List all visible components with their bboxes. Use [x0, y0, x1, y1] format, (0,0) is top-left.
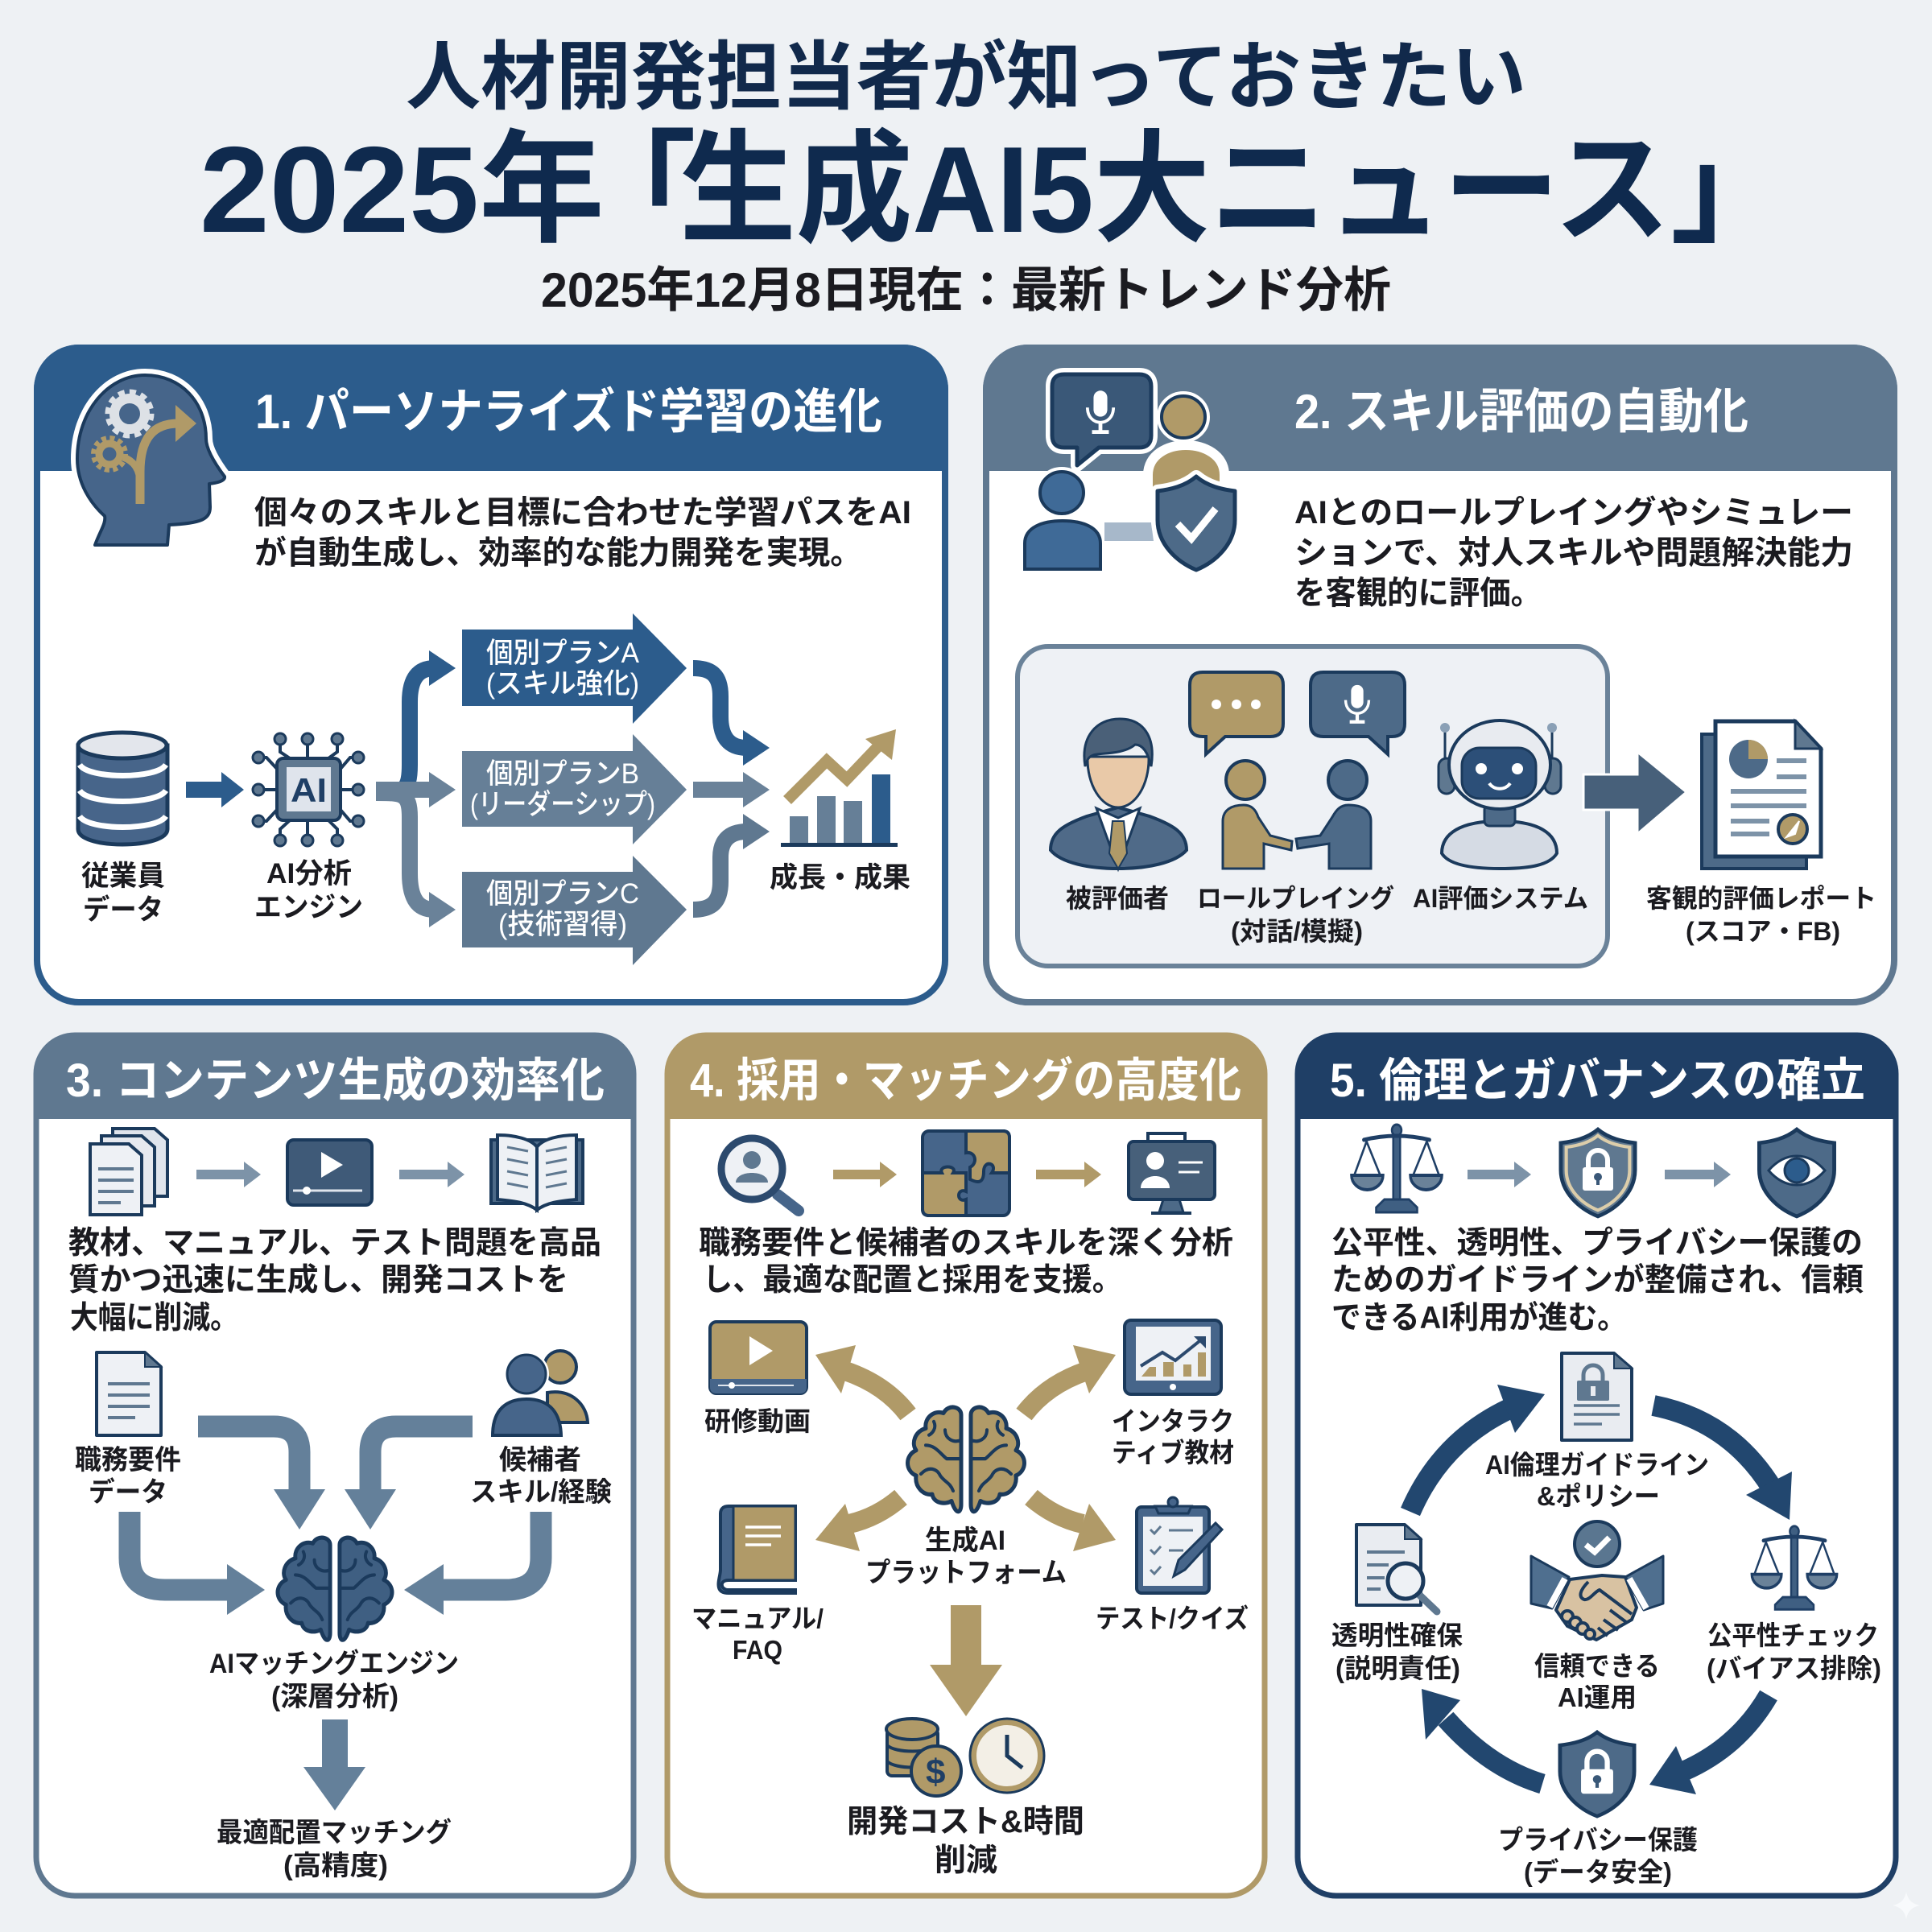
label: privacy protection: プライバシー保護 [1498, 1825, 1698, 1855]
label: employee data [81, 861, 165, 926]
curved arrows from brain [815, 1345, 1116, 1551]
arrow [1468, 1162, 1531, 1187]
panel 2 description: ションで、対人スキルや問題解決能力 [1294, 535, 1853, 571]
plan B arrow [462, 734, 687, 844]
icon: eye shield [1759, 1129, 1835, 1216]
title line 2: 生成AI5大ニュース [679, 122, 1670, 258]
icon: open book [491, 1135, 583, 1210]
label: optimal placement: (高精度) [283, 1851, 388, 1881]
labels: simulation [1066, 884, 1588, 946]
cycle arrows [1410, 1385, 1792, 1794]
labels: simulation: ロールプレイング [1197, 884, 1394, 913]
label: generative AI platform: 生成AI [925, 1525, 1005, 1556]
plan C arrow [462, 856, 687, 965]
panel 2: skill assessment [983, 345, 1897, 1002]
arrow [1036, 1162, 1101, 1187]
icon: monitor [1129, 1133, 1215, 1213]
label: generative AI platform [865, 1525, 1067, 1588]
panel 4 heading: 4. 採用・マッチングの高度化 [690, 1055, 1241, 1107]
title line 1: 人材開発担当者が知っておきたい [406, 35, 1526, 119]
icon: manual book [718, 1506, 795, 1593]
label: transparency: 透明性確保 [1331, 1620, 1463, 1650]
panel 5 description: ためのガイドラインが整備され、信頼 [1331, 1263, 1864, 1298]
icon: roleplay handshake [1223, 761, 1371, 869]
labels: inputs: スキル/経験 [470, 1477, 612, 1508]
panel 1: personalized learning [34, 345, 948, 1002]
label: AI engine [254, 858, 363, 923]
label: AI ethics guidelines: AI倫理ガイドライン [1485, 1450, 1709, 1480]
icon: corner sparkle [1893, 1892, 1920, 1919]
icon: puzzle [923, 1131, 1009, 1216]
arrow [1665, 1162, 1731, 1187]
label: generative AI platform: プラットフォーム [865, 1558, 1067, 1588]
icon: tablet chart [1125, 1320, 1221, 1394]
panel 4: recruiting and matching [665, 1033, 1267, 1896]
panel 3 description [68, 1226, 601, 1335]
icon: brain [278, 1538, 392, 1640]
label: AI matching engine: (深層分析) [271, 1682, 398, 1712]
arrow: down [930, 1605, 1002, 1716]
plan C arrow: (技術習得) [498, 909, 627, 940]
label: AI engine: AI分析 [266, 858, 352, 890]
label: transparency [1331, 1620, 1463, 1683]
icon: clock [970, 1719, 1044, 1793]
icon: growth chart [781, 729, 898, 847]
label: employee data: 従業員 [81, 861, 165, 892]
icon: coins [886, 1719, 961, 1796]
label: AI engine: エンジン [254, 892, 363, 923]
icon: people, mic and shield [1025, 374, 1235, 570]
plan A arrow [462, 613, 687, 724]
icon: coins: $ [926, 1752, 945, 1792]
label: AI ethics guidelines [1485, 1450, 1709, 1511]
icon: report document [1702, 721, 1821, 869]
icon: gold video [710, 1322, 807, 1393]
plan A arrow: 個別プランA [486, 638, 640, 669]
icon: database [78, 733, 167, 844]
label: fairness check [1707, 1620, 1881, 1683]
labels: inputs: データ [89, 1476, 167, 1508]
arrow [196, 1162, 261, 1187]
icon: lock shield [1561, 1129, 1635, 1216]
labels: inputs: 職務要件 [75, 1445, 181, 1476]
arrow: to report [1583, 752, 1686, 834]
label: objective report: 客観的評価レポート [1646, 884, 1876, 913]
panel 5: ethics and governance [1295, 1033, 1898, 1896]
label: trusted AI operation: 信頼できる [1534, 1651, 1660, 1681]
arrow: data to AI [186, 772, 244, 807]
icon: magnifier with person [721, 1138, 799, 1211]
panel 5 description [1331, 1226, 1864, 1335]
icon: job requirement document [97, 1352, 161, 1435]
title line 2: 2025年 [200, 122, 605, 258]
labels: simulation: 被評価者 [1066, 884, 1169, 913]
label: fairness check: 公平性チェック [1707, 1620, 1879, 1650]
labels: inputs [75, 1445, 612, 1508]
panel 2 description [1294, 495, 1853, 611]
label: interactive materials [1112, 1406, 1234, 1468]
panel 2 heading: 2. スキル評価の自動化 [1294, 385, 1748, 439]
icon: evaluated person [1051, 719, 1187, 869]
icon: candidates [493, 1351, 588, 1435]
labels: simulation: AI評価システム [1413, 884, 1588, 913]
merge arrows to growth [693, 668, 770, 910]
icon: AI robot [1439, 720, 1561, 869]
panel 3: content generation [34, 1033, 636, 1896]
panel 2 description: AIとのロールプレイングやシミュレー [1294, 495, 1853, 530]
arrow: down [303, 1719, 365, 1810]
panel 5 description: できるAI利用が進む。 [1331, 1301, 1627, 1335]
label: fairness check: (バイアス排除) [1707, 1653, 1881, 1683]
label: trusted AI operation: AI運用 [1558, 1682, 1637, 1712]
icon: documents [90, 1129, 167, 1215]
plan B arrow: (リーダーシップ) [470, 789, 655, 820]
label: cost and time reduction: 開発コスト&時間 [847, 1805, 1084, 1839]
icon: gold speech bubble [1190, 672, 1283, 754]
title line 2: 「 [574, 122, 696, 258]
panel 1 heading: 1. パーソナライズド学習の進化 [255, 385, 882, 439]
label: interactive materials: ティブ教材 [1112, 1438, 1234, 1468]
subtitle: 2025年12月8日現在：最新トレンド分析 [541, 263, 1391, 317]
plan A arrow: (スキル強化) [486, 668, 639, 700]
panel 1 description: が自動生成し、効率的な能力開発を実現。 [254, 535, 862, 571]
branch arrows to plans [376, 650, 456, 927]
label: growth and results: 成長・成果 [770, 862, 910, 894]
panel 3 description: 質かつ迅速に生成し、開発コストを [68, 1263, 568, 1298]
labels: inputs: 候補者 [499, 1445, 581, 1476]
icon: fairness scales [1752, 1526, 1837, 1609]
arrow [399, 1162, 464, 1187]
panel 2 description: を客観的に評価。 [1294, 576, 1542, 611]
label: trusted AI operation [1534, 1651, 1660, 1712]
label: cost and time reduction: 削減 [935, 1843, 997, 1878]
title block [200, 35, 1793, 317]
labels: simulation: (対話/模擬) [1231, 917, 1363, 946]
label: manual FAQ: マニュアル/ [691, 1604, 824, 1633]
icon: blue mic bubble [1311, 672, 1405, 754]
title line 2: 」 [1670, 122, 1793, 258]
panel 3 heading: 3. コンテンツ生成の効率化 [66, 1055, 605, 1107]
panel 4 description [699, 1226, 1233, 1298]
icon: video [287, 1140, 372, 1205]
label: interactive materials: インタラク [1112, 1406, 1234, 1436]
icon: scales [1352, 1125, 1442, 1212]
label: objective report: (スコア・FB) [1686, 917, 1840, 946]
label: manual FAQ: FAQ [733, 1635, 782, 1665]
icon: AI chip: AI [291, 771, 327, 809]
label: cost and time reduction [847, 1805, 1084, 1878]
panel 5 description: 公平性、透明性、プライバシー保護の [1331, 1226, 1863, 1261]
icon: AI ethics policy document [1562, 1353, 1632, 1440]
label: manual FAQ [691, 1604, 824, 1665]
label: privacy protection: (データ安全) [1524, 1857, 1672, 1887]
icon: handshake [1531, 1556, 1663, 1640]
plan C arrow: 個別プランC [486, 878, 639, 910]
icon: gold brain [908, 1407, 1024, 1512]
panel 4 description: 職務要件と候補者のスキルを深く分析 [699, 1226, 1233, 1261]
arrow [833, 1162, 897, 1187]
label: optimal placement [217, 1818, 452, 1881]
label: AI ethics guidelines: &ポリシー [1537, 1481, 1660, 1511]
label: test quiz: テスト/クイズ [1096, 1604, 1249, 1633]
icon: clipboard with pencil [1137, 1497, 1222, 1593]
label: privacy protection [1498, 1825, 1698, 1887]
icon: check badge [1575, 1521, 1620, 1567]
panel 3 description: 大幅に削減。 [70, 1301, 238, 1335]
label: AI matching engine: AIマッチングエンジン [209, 1649, 459, 1679]
plan B arrow: 個別プランB [486, 758, 639, 790]
panel 1 description [254, 495, 911, 571]
label: optimal placement: 最適配置マッチング [217, 1818, 452, 1848]
title line 2 [200, 122, 1793, 258]
panel 3 description: 教材、マニュアル、テスト問題を高品 [68, 1226, 601, 1261]
label: transparency: (説明責任) [1335, 1653, 1460, 1683]
icon: head with gears and path [77, 375, 225, 545]
label: training video: 研修動画 [704, 1406, 811, 1436]
icon: AI chip [253, 733, 364, 846]
panel 5 heading: 5. 倫理とガバナンスの確立 [1330, 1055, 1865, 1107]
icon: document with magnifier [1356, 1525, 1437, 1612]
inner simulation box [1018, 646, 1608, 966]
panel 4 description: し、最適な配置と採用を支援。 [703, 1263, 1122, 1298]
icon: privacy shield [1560, 1732, 1634, 1816]
label: objective report [1646, 884, 1876, 946]
label: AI matching engine [209, 1649, 459, 1712]
panel 1 description: 個々のスキルと目標に合わせた学習パスをAI [254, 495, 911, 530]
label: employee data: データ [83, 894, 163, 926]
converging arrows [130, 1426, 541, 1615]
